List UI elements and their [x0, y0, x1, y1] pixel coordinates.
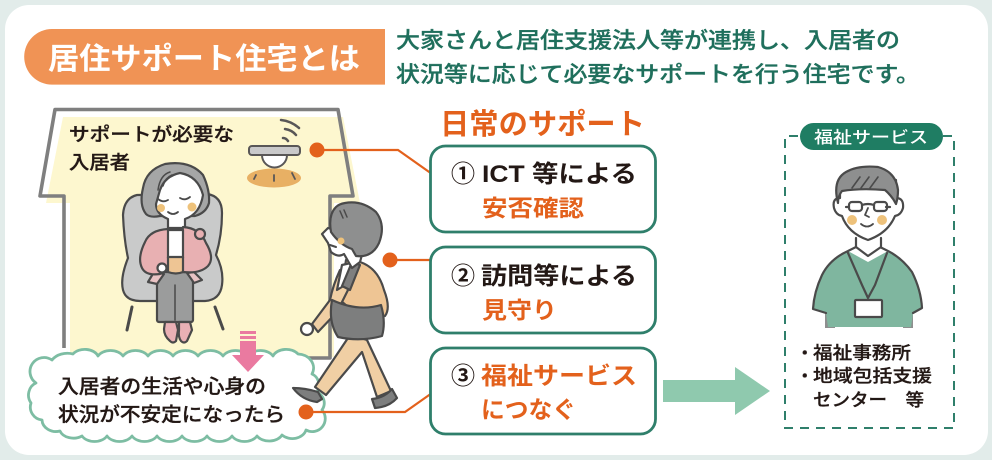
text block: definition: 状況等に応じて必要なサポートを行う住宅です。 — [396, 62, 920, 87]
text block: definition — [396, 28, 920, 87]
text block: welfare service list: センター 等 — [813, 390, 924, 410]
connector: visitor to card 2 — [382, 252, 432, 268]
connector: sensor to card 1 — [310, 142, 432, 174]
card: connect to welfare services: ③ — [451, 363, 475, 390]
heading: title banner: 居住サポート住宅とは — [48, 43, 360, 76]
card: ICT monitoring: 安否確認 — [482, 195, 584, 221]
text block: welfare service list: ・ — [796, 343, 814, 363]
card: visit monitoring: 見守り — [482, 297, 557, 323]
icon: seated elderly resident — [122, 163, 223, 342]
text: person needing support: サポートが必要な — [69, 124, 234, 145]
arrow: to welfare services — [663, 367, 770, 415]
heading: title banner — [24, 29, 385, 85]
card: ICT monitoring: ICT 等による — [482, 161, 637, 188]
text: person needing support — [69, 124, 234, 173]
panel: welfare services — [785, 123, 954, 428]
card: ICT monitoring: ① — [451, 161, 475, 188]
text block: definition: 大家さんと居住支援法人等が連携し、入居者の — [396, 28, 900, 53]
callout: unstable condition cloud: 入居者の生活や心身の — [58, 376, 266, 398]
text block: welfare service list: ・ — [796, 366, 814, 386]
icon: visiting support worker — [293, 202, 397, 408]
text: person needing support: 入居者 — [69, 152, 130, 173]
text block: welfare service list — [796, 343, 933, 410]
panel: house — [40, 110, 360, 358]
icon: ceiling sensor — [247, 120, 301, 188]
card: visit monitoring: ② — [451, 263, 475, 290]
label: welfare services: 福祉サービス — [814, 128, 928, 147]
card: connect to welfare services — [430, 348, 656, 434]
callout: unstable condition cloud: 状況が不安定になったら — [58, 404, 285, 426]
card: visit monitoring — [430, 247, 656, 333]
icon: welfare staff — [813, 167, 922, 328]
text block: welfare service list: 地域包括支援 — [813, 366, 933, 386]
callout: unstable condition cloud — [28, 349, 325, 441]
card: visit monitoring: 訪問等による — [481, 263, 637, 290]
card: connect to welfare services: 福祉サービス — [481, 363, 637, 390]
label: welfare services — [800, 123, 943, 150]
icon: pink down arrow — [232, 331, 264, 372]
card: connect to welfare services: につなぐ — [481, 397, 576, 424]
connector: cloud to card 3 — [298, 393, 432, 420]
text block: welfare service list: 福祉事務所 — [813, 343, 911, 363]
card: ICT monitoring — [430, 146, 656, 232]
heading: daily support: 日常のサポート — [440, 108, 645, 141]
